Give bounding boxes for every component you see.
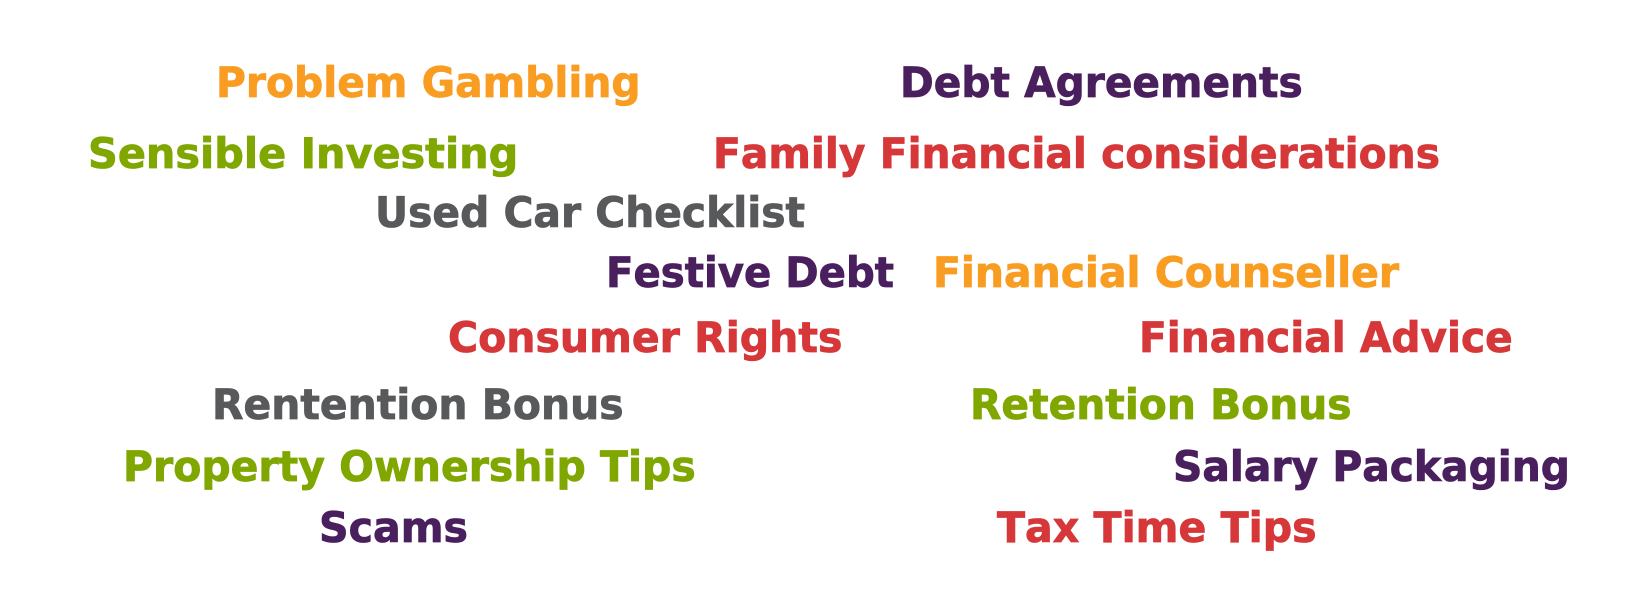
word: Used Car Checklist: Used Car Checklist bbox=[375, 188, 805, 237]
word: Festive Debt: Festive Debt bbox=[606, 248, 894, 297]
word: Consumer Rights: Consumer Rights bbox=[448, 313, 842, 362]
word: Family Financial considerations: Family Financial considerations bbox=[713, 129, 1440, 178]
word: Problem Gambling: Problem Gambling bbox=[216, 58, 641, 107]
word: Retention Bonus: Retention Bonus bbox=[970, 380, 1352, 429]
word: Financial Counseller: Financial Counseller bbox=[933, 248, 1399, 297]
word: Tax Time Tips: Tax Time Tips bbox=[997, 503, 1317, 552]
word: Debt Agreements: Debt Agreements bbox=[900, 58, 1303, 107]
word: Scams: Scams bbox=[319, 503, 468, 552]
word: Property Ownership Tips: Property Ownership Tips bbox=[123, 442, 696, 491]
word: Financial Advice: Financial Advice bbox=[1139, 313, 1513, 362]
word: Sensible Investing: Sensible Investing bbox=[88, 129, 518, 178]
word: Salary Packaging: Salary Packaging bbox=[1173, 442, 1570, 491]
word: Rentention Bonus: Rentention Bonus bbox=[212, 380, 624, 429]
